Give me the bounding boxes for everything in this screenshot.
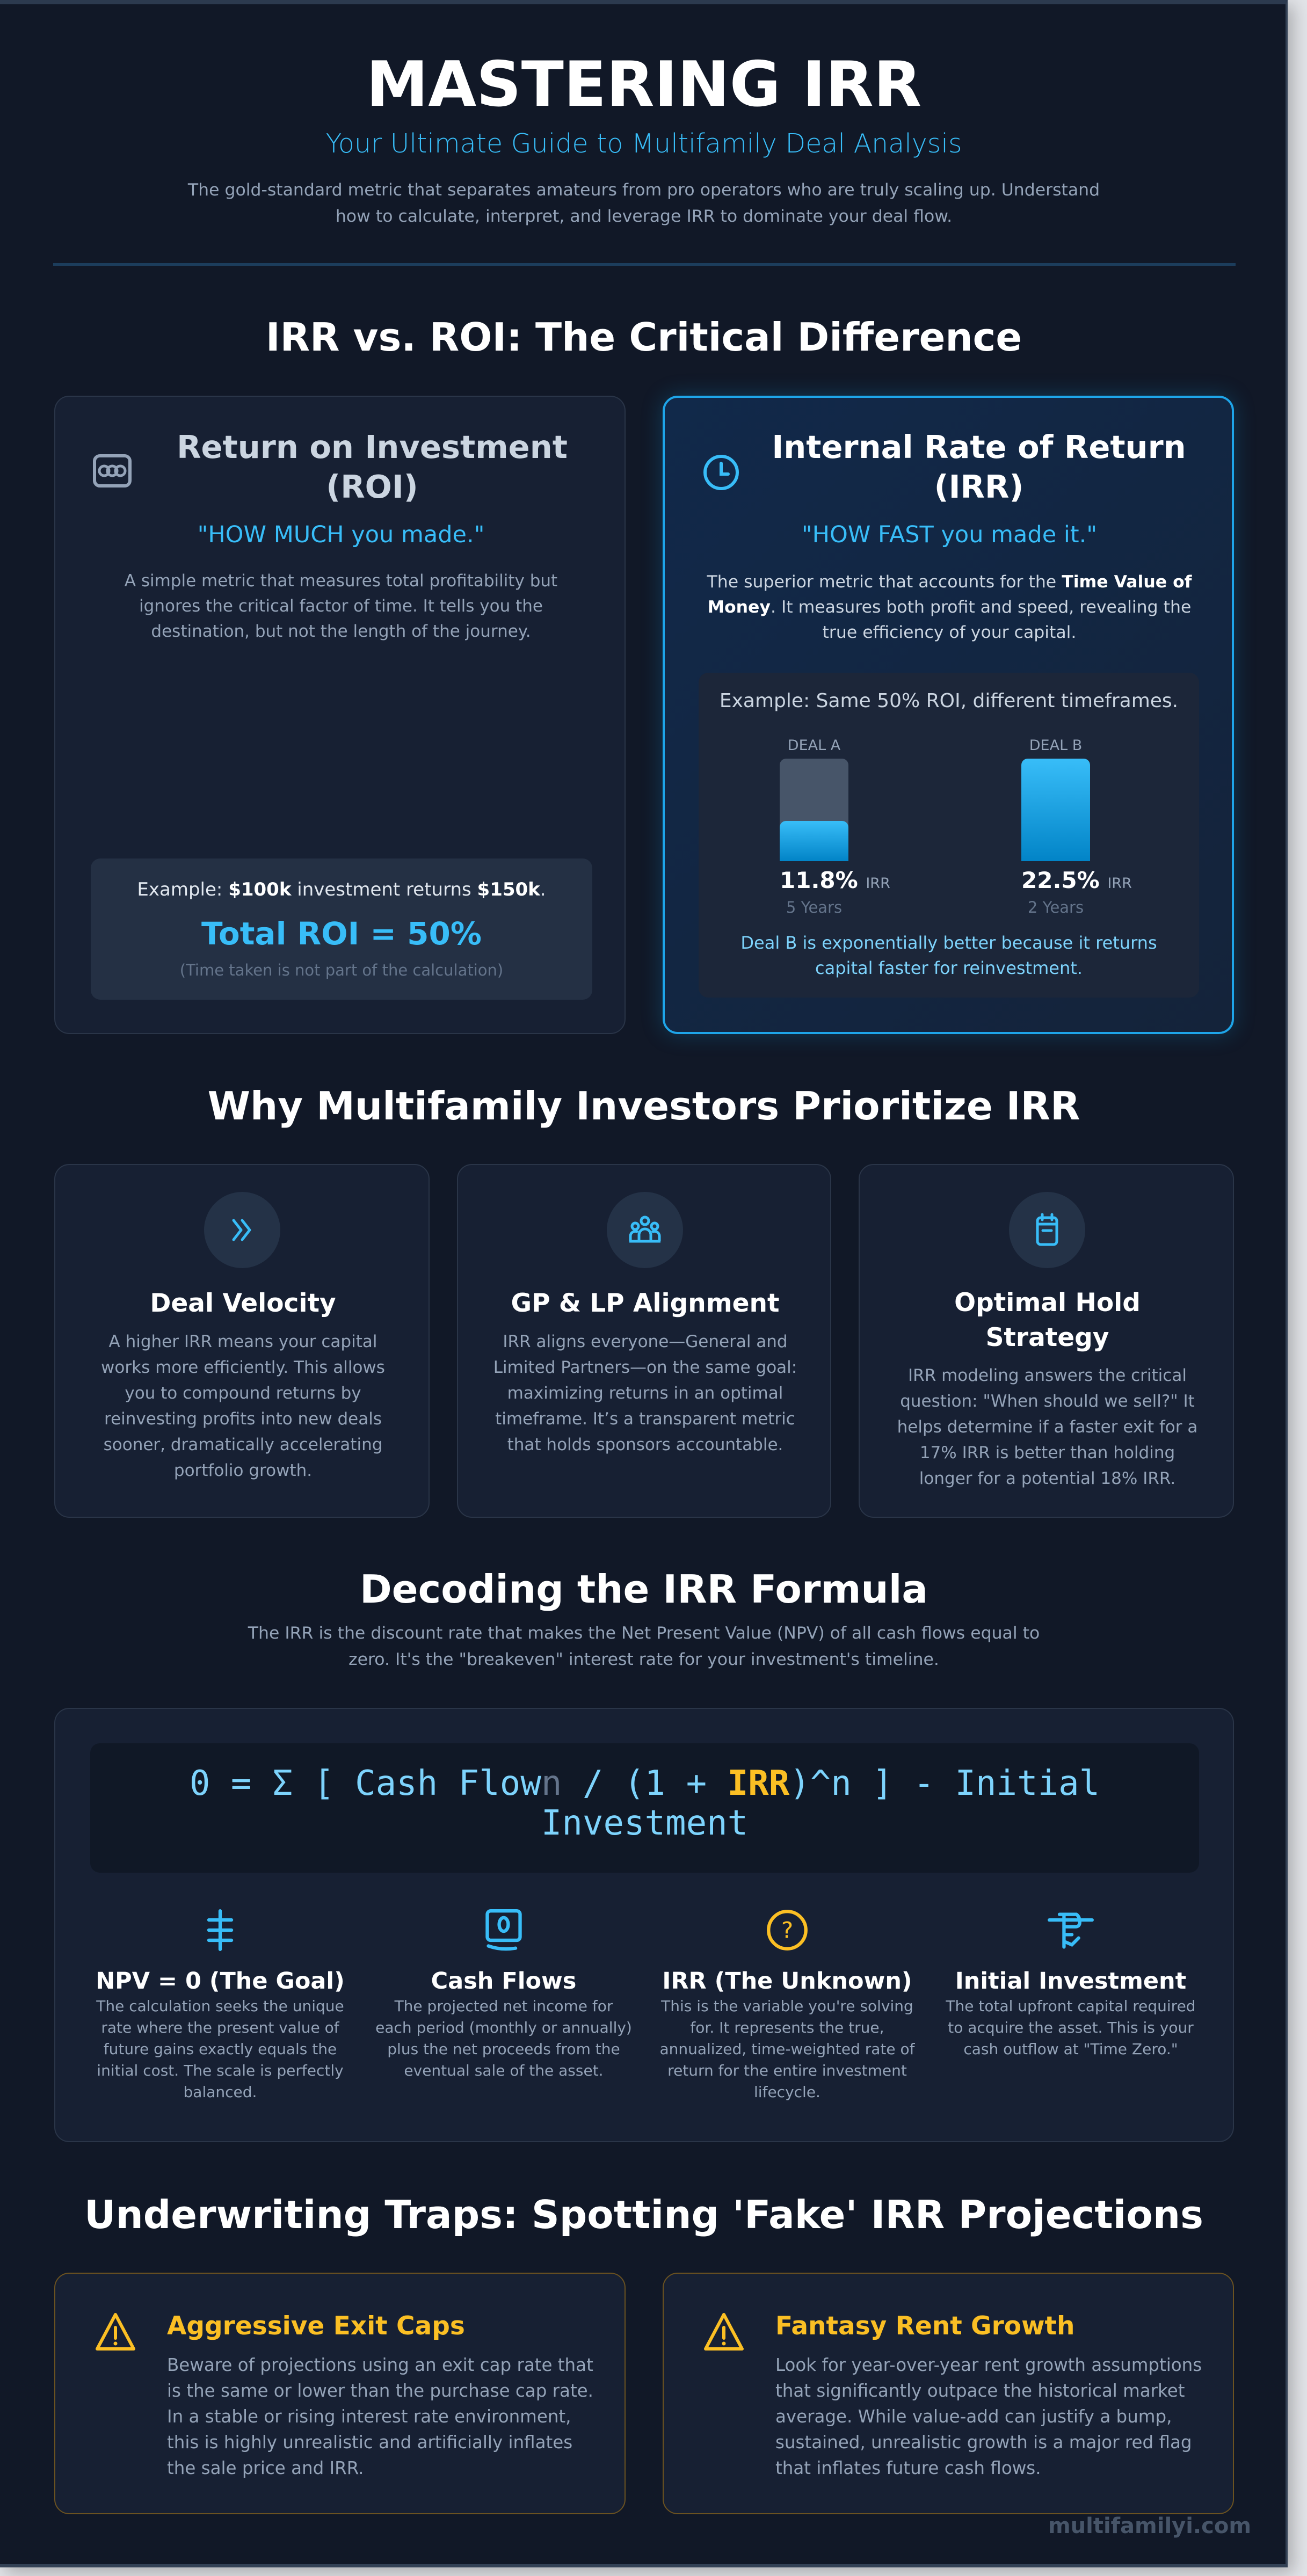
- chart caption: Deal B is exponentially better because it returns capital faster for reinvestment.: [740, 933, 1157, 978]
- bar: deal A: 5 Years: [786, 898, 842, 916]
- panel: GP LP alignment: [457, 1164, 831, 1518]
- IRR description: The superior metric that accounts for the Time Value of Money. It measures both profit and speed, revealing the true efficiency of your capital.: [707, 572, 1192, 642]
- IRR title: Internal Rate of Return: [772, 428, 1186, 465]
- bar: deal A: DEAL A: [788, 737, 840, 754]
- heading: IRR vs ROI: IRR vs. ROI: The Critical Difference: [266, 315, 1022, 360]
- panel: optimal hold: Optimal Hold: [954, 1288, 1141, 1318]
- panel: GP LP alignment: IRR aligns everyone—General and Limited Partners—on the same goal: maximizing returns in an optimal timeframe. It’s a transparent metric that holds sponsors accountable.: [493, 1332, 797, 1454]
- panel: ROI: [54, 396, 626, 1034]
- item: IRR unknown: [659, 1910, 915, 2101]
- item: initial investment: Initial Investment: [955, 1968, 1186, 1995]
- ROI example box: (Time taken is not part of the calculation): [180, 961, 503, 979]
- bar: deal A: 11.8% IRR: [780, 867, 890, 893]
- panel: rent growth: Look for year-over-year rent growth assumptions that significantly outpace the historical market average. While value-add can justify a bump, sustained, unrealistic growth is a major red flag that inflates future cash flows.: [775, 2355, 1202, 2478]
- panel: formula: [54, 1708, 1234, 2142]
- panel: deal velocity: Deal Velocity: [150, 1289, 336, 1318]
- panel: deal velocity: A higher IRR means your capital works more efficiently. This allows you to compound returns by reinvesting profits into new deals sooner, dramatically accelerating portfolio growth.: [101, 1332, 385, 1480]
- formula intro: The IRR is the discount rate that makes the Net Present Value (NPV) of all cash flows equal to zero. It's the "breakeven" interest rate for your investment's timeline.: [248, 1624, 1040, 1669]
- icon: calendar: [1009, 1192, 1085, 1268]
- subtitle: Your Ultimate Guide to Multifamily Deal Analysis: [325, 128, 962, 159]
- panel: rent growth: Fantasy Rent Growth: [775, 2311, 1074, 2341]
- ROI example box: [91, 858, 592, 1000]
- item: cash flows: [375, 1909, 632, 2079]
- IRR title: [772, 428, 1186, 505]
- bar: deal A: [780, 737, 890, 916]
- heading: traps: Underwriting Traps: Spotting 'Fake' IRR Projections: [84, 2192, 1203, 2237]
- IRR example chart: [699, 673, 1199, 998]
- panel: exit caps: [54, 2273, 626, 2514]
- bar: deal B: 22.5% IRR: [1021, 867, 1132, 893]
- title: MASTERING IRR: [366, 48, 921, 121]
- icon: ROI: [93, 454, 132, 487]
- IRR title: (IRR): [934, 468, 1023, 505]
- panel: optimal hold: IRR modeling answers the critical question: "When should we sell?" It helps determine if a faster exit for a 17% IRR is better than holding longer for a potential 18% IRR.: [897, 1366, 1197, 1488]
- intro text: The gold-standard metric that separates amateurs from pro operators who are truly scaling up. Understand how to calculate, interpret, and leverage IRR to dominate your deal flow.: [188, 180, 1100, 226]
- ROI quote: "HOW MUCH you made.": [198, 521, 484, 548]
- item: cash flows: The projected net income for each period (monthly or annually) plus the net proceeds from the eventual sale of the asset.: [375, 1997, 632, 2079]
- ROI example box: Example: $100k investment returns $150k.: [137, 879, 546, 900]
- formula box: Investment: [541, 1803, 748, 1843]
- IRR quote: "HOW FAST you made it.": [802, 521, 1097, 548]
- item: initial investment: [946, 1912, 1196, 2058]
- footer brand: multifamilyi.com: [1048, 2514, 1251, 2538]
- panel: IRR: [663, 396, 1234, 1034]
- icon: warning: [704, 2313, 744, 2351]
- item: NPV: The calculation seeks the unique rate where the present value of future gains exactly equals the initial cost. The scale is perfectly balanced.: [96, 1997, 344, 2101]
- IRR example chart: Example: Same 50% ROI, different timeframes.: [720, 690, 1178, 712]
- item: IRR unknown: ?: [781, 1917, 793, 1944]
- panel: GP LP alignment: GP & LP Alignment: [511, 1289, 779, 1318]
- icon: clock: [703, 455, 739, 490]
- item: cash flows: Cash Flows: [431, 1968, 576, 1995]
- panel: deal velocity: [54, 1164, 430, 1518]
- bar: deal B: [1021, 737, 1132, 916]
- panel: exit caps: Beware of projections using an exit cap rate that is the same or lower than the purchase cap rate. In a stable or rising interest rate environment, this is highly unrealistic and artificially inflates the sale price and IRR.: [167, 2355, 593, 2478]
- panel: optimal hold: [859, 1164, 1234, 1518]
- icon: people: [607, 1192, 683, 1268]
- panel: exit caps: Aggressive Exit Caps: [167, 2311, 465, 2341]
- ROI example box: Total ROI = 50%: [201, 915, 482, 952]
- item: IRR unknown: This is the variable you're solving for. It represents the true, annualized, time-weighted rate of return for the entire investment lifecycle.: [659, 1997, 915, 2101]
- item: NPV: [96, 1909, 345, 2101]
- heading: why prioritize: Why Multifamily Investors Prioritize IRR: [208, 1083, 1080, 1129]
- item: NPV: NPV = 0 (The Goal): [96, 1968, 345, 1995]
- item: IRR unknown: IRR (The Unknown): [662, 1968, 912, 1995]
- item: initial investment: The total upfront capital required to acquire the asset. This is your cash outflow at "Time Zero.": [946, 1997, 1196, 2058]
- bar: deal B: DEAL B: [1029, 737, 1082, 754]
- ROI title: [177, 428, 568, 505]
- heading: formula: Decoding the IRR Formula: [360, 1567, 928, 1612]
- ROI title: Return on Investment: [177, 428, 568, 465]
- panel: optimal hold: Strategy: [986, 1323, 1109, 1352]
- bar: deal B: 2 Years: [1028, 898, 1084, 916]
- ROI title: (ROI): [326, 468, 418, 505]
- ROI description: A simple metric that measures total profitability but ignores the critical factor of time. It tells you the destination, but not the length of the journey.: [125, 571, 557, 641]
- panel: rent growth: [663, 2273, 1234, 2514]
- icon: warning: [96, 2313, 135, 2351]
- icon: chevrons: [204, 1192, 280, 1268]
- formula box: 0 = Σ [ Cash Flown / (1 + IRR)^n ] - Initial: [190, 1764, 1100, 1803]
- formula box: [90, 1743, 1199, 1873]
